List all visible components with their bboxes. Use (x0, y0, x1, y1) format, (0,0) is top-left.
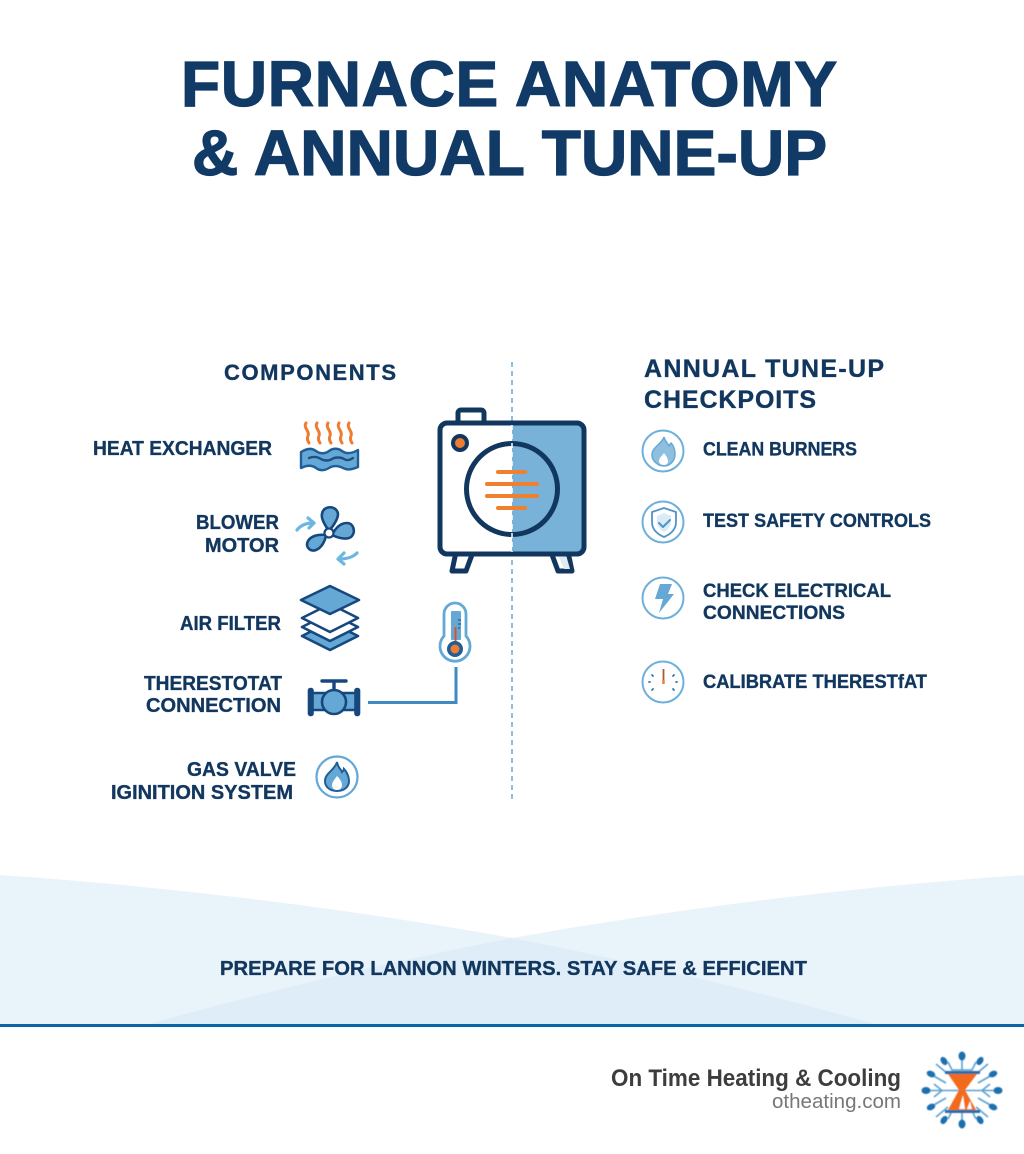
checkpoint: calibrate thermostat (642, 662, 927, 702)
footer tagline: PREPARE FOR LANNON WINTERS. STAY SAFE & EFFICIENT (220, 958, 807, 980)
heading: annual tune-up checkpoints: ANNUAL TUNE-UP (644, 355, 884, 383)
component label: gas valve ignition system: IGINITION SYSTEM (111, 782, 293, 804)
component label: thermostat connection: THERESTOTAT (144, 673, 282, 695)
heading: components: COMPONENTS (224, 360, 396, 385)
icon: lightning bolt (642, 578, 684, 618)
title: & ANNUAL TUNE-UP (192, 117, 827, 189)
component label: thermostat connection: CONNECTION (146, 695, 281, 717)
component label: air filter: AIR FILTER (180, 613, 282, 635)
checkpoint: check electrical connections: CHECK ELECTRICAL (703, 580, 891, 602)
footer divider bar (0, 1024, 1024, 1027)
checkpoint: clean burners (642, 430, 857, 472)
checkpoint: clean burners: CLEAN BURNERS (703, 438, 857, 460)
checkpoint: test safety controls (642, 502, 931, 542)
heading: annual tune-up checkpoints: CHECKPOITS (644, 386, 816, 414)
connector line from valve to thermostat (368, 667, 456, 702)
checkpoint: calibrate thermostat: CALIBRATE THERESTfAT (703, 671, 927, 693)
title (181, 48, 837, 189)
brand name and url: On Time Heating & Cooling (611, 1065, 901, 1092)
checkpoint: check electrical connections (642, 578, 891, 624)
component label: thermostat connection (144, 673, 282, 717)
brand name and url (611, 1065, 901, 1113)
checkpoint: test safety controls: TEST SAFETY CONTROLS (703, 510, 931, 532)
icon: thermostat (440, 603, 470, 661)
component label: gas valve ignition system: GAS VALVE (187, 759, 296, 781)
icon: blower fan (297, 507, 357, 564)
footer wave background (0, 875, 1024, 1024)
component label: heat exchanger: HEAT EXCHANGER (93, 438, 273, 460)
icon: ignition flame (316, 756, 358, 798)
brand name and url: otheating.com (772, 1091, 901, 1113)
component label: blower motor: MOTOR (205, 535, 280, 557)
centre dashed divider (511, 362, 513, 800)
icon: gauge (642, 662, 684, 702)
icon: burner flame (642, 430, 684, 472)
icon: air filter layers (301, 586, 359, 650)
title: FURNACE ANATOMY (181, 48, 837, 120)
component label: gas valve ignition system (111, 759, 296, 804)
logo: snowflake hourglass (922, 1052, 1002, 1128)
component label: blower motor: BLOWER (196, 512, 280, 534)
heading: annual tune-up checkpoints (644, 355, 884, 414)
icon: valve (309, 681, 359, 715)
furnace illustration (440, 410, 584, 571)
icon: heat exchanger (301, 423, 358, 470)
checkpoint: check electrical connections: CONNECTIONS (703, 602, 845, 624)
icon: shield (642, 502, 684, 542)
component label: blower motor (196, 512, 280, 557)
